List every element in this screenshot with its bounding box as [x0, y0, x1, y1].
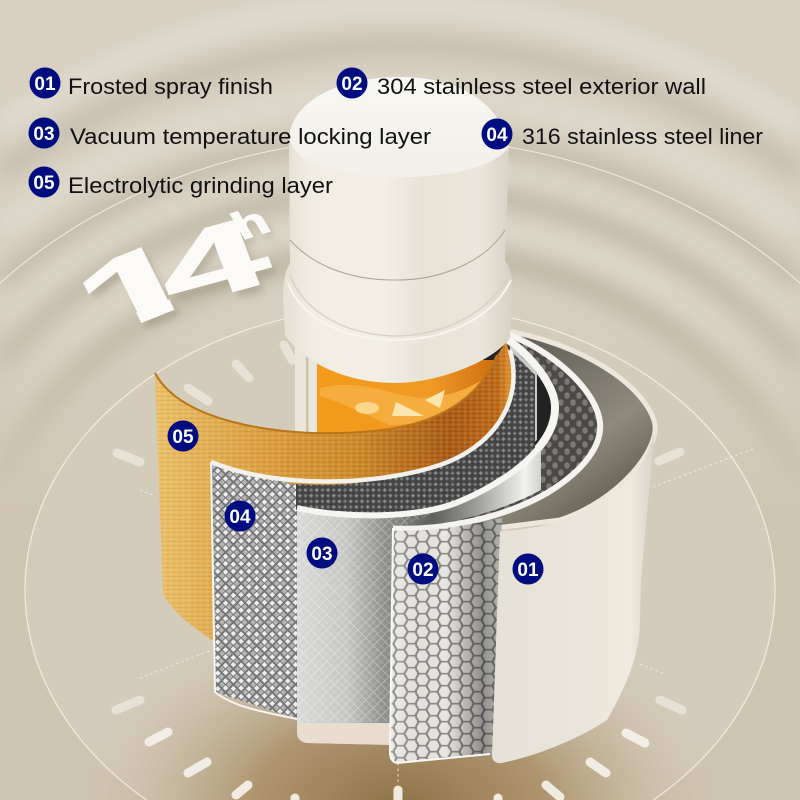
- orange drink: [317, 360, 505, 440]
- 14h text: [83, 210, 272, 326]
- badge 05: [168, 420, 198, 452]
- lid top: [289, 77, 509, 177]
- legend list: [28, 68, 764, 198]
- legend 05: [28, 166, 334, 198]
- layer number badges: [168, 420, 544, 584]
- legend 05: 05: [33, 173, 55, 194]
- 14h text: 4: [140, 195, 284, 328]
- badge 03: [306, 538, 338, 568]
- 14h shadow: h: [227, 204, 281, 252]
- back wall of outer shell: [400, 332, 655, 540]
- legend 02: [336, 68, 706, 99]
- 14h shadow: [92, 218, 276, 328]
- legend 04: [482, 118, 764, 150]
- layer 05 gold wall: [155, 342, 520, 640]
- back of honeycomb layer: [393, 335, 600, 528]
- 14h heading graphic: [83, 210, 276, 328]
- layer stack cutaway: [155, 332, 655, 763]
- legend 04: 316 stainless steel liner: [522, 124, 764, 149]
- clock tick marks: [116, 345, 682, 800]
- layer 02 honeycomb wall: [390, 335, 600, 763]
- legend 04: 04: [486, 125, 508, 146]
- badge 04: [224, 500, 256, 532]
- badge 01: [512, 554, 544, 584]
- legend 03: [28, 118, 432, 149]
- badge 02: [408, 554, 438, 584]
- layer 03 vacuum wall: [297, 340, 555, 745]
- vacuum flask lid and body: [283, 77, 512, 383]
- badge 03: 03: [311, 544, 333, 565]
- badge 05: 05: [172, 427, 194, 448]
- legend 05: Electrolytic grinding layer: [68, 173, 334, 198]
- legend 03: Vacuum temperature locking layer: [70, 124, 432, 149]
- surface inside inner ring: [25, 305, 775, 800]
- back of vacuum layer: [297, 340, 555, 515]
- 14h shadow: 4: [146, 202, 290, 335]
- 14h text: h: [223, 199, 277, 247]
- legend 01: [30, 68, 273, 99]
- lower ring: [283, 262, 512, 383]
- badge 04: 04: [229, 507, 251, 528]
- 14h shadow: 1: [62, 220, 224, 365]
- silver inner strip: [500, 345, 537, 470]
- legend 02: 02: [341, 74, 363, 95]
- badge 01: 01: [517, 560, 539, 581]
- legend 01: 01: [34, 74, 56, 95]
- layer 01 frosted outer wall: [492, 425, 655, 763]
- 14h text: 1: [56, 214, 218, 359]
- body: [289, 138, 509, 335]
- cup inner column: [295, 340, 317, 440]
- layer 04 woven wall: [211, 350, 535, 720]
- badge 02: 02: [412, 560, 434, 581]
- legend 03: 03: [33, 124, 55, 145]
- legend 02: 304 stainless steel exterior wall: [377, 74, 706, 99]
- legend 01: Frosted spray finish: [68, 74, 273, 99]
